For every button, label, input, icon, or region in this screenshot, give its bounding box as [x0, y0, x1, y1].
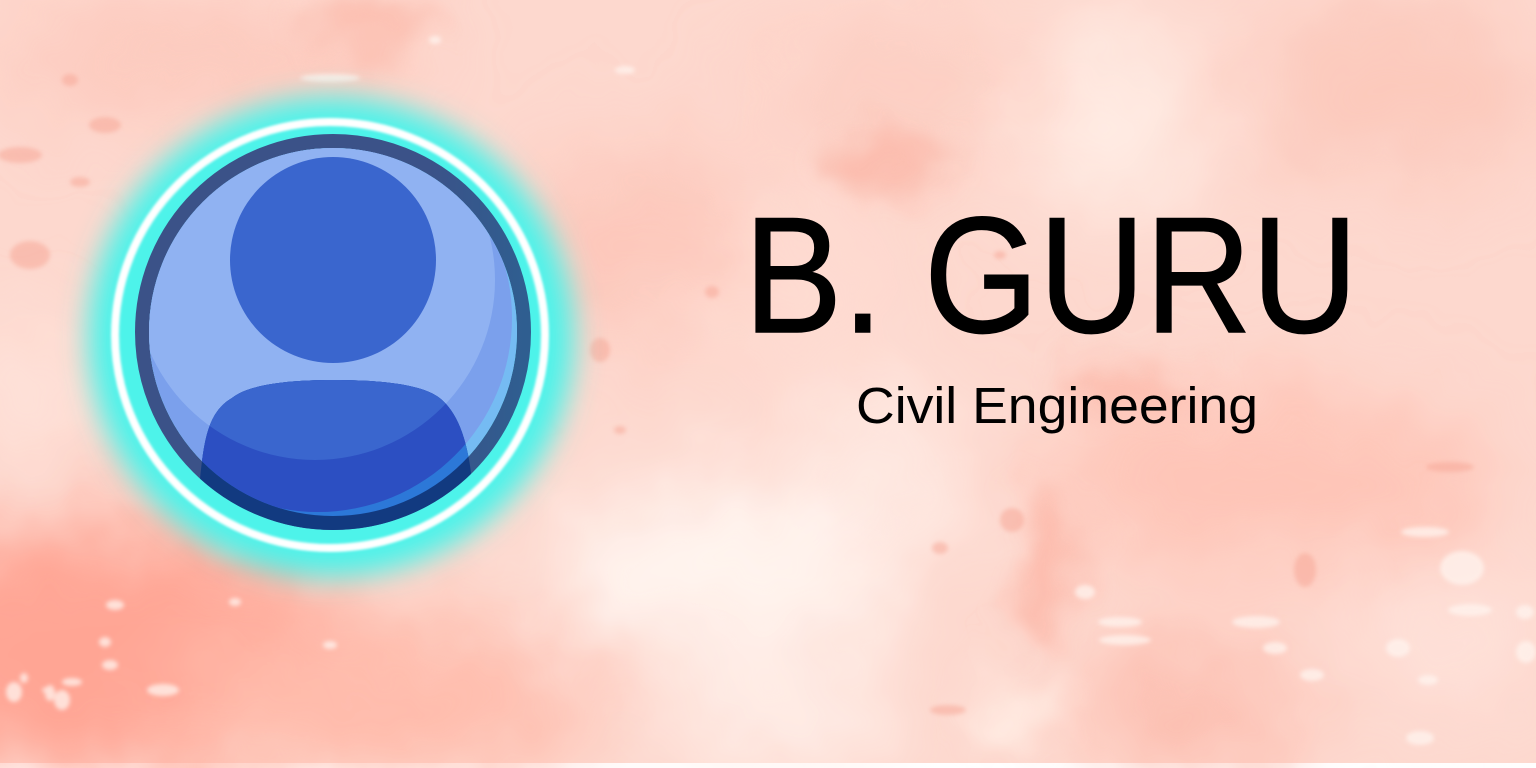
- avatar head: [230, 157, 436, 363]
- white ring: [115, 122, 545, 548]
- avatar disc: [124, 100, 524, 523]
- icon: glowing profile avatar: [88, 97, 574, 577]
- avatar body: [200, 380, 472, 530]
- subtitle: department: Civil Engineering: [856, 377, 1258, 434]
- title: name: B. GURU: [744, 183, 1358, 367]
- cyan glow: [88, 97, 574, 577]
